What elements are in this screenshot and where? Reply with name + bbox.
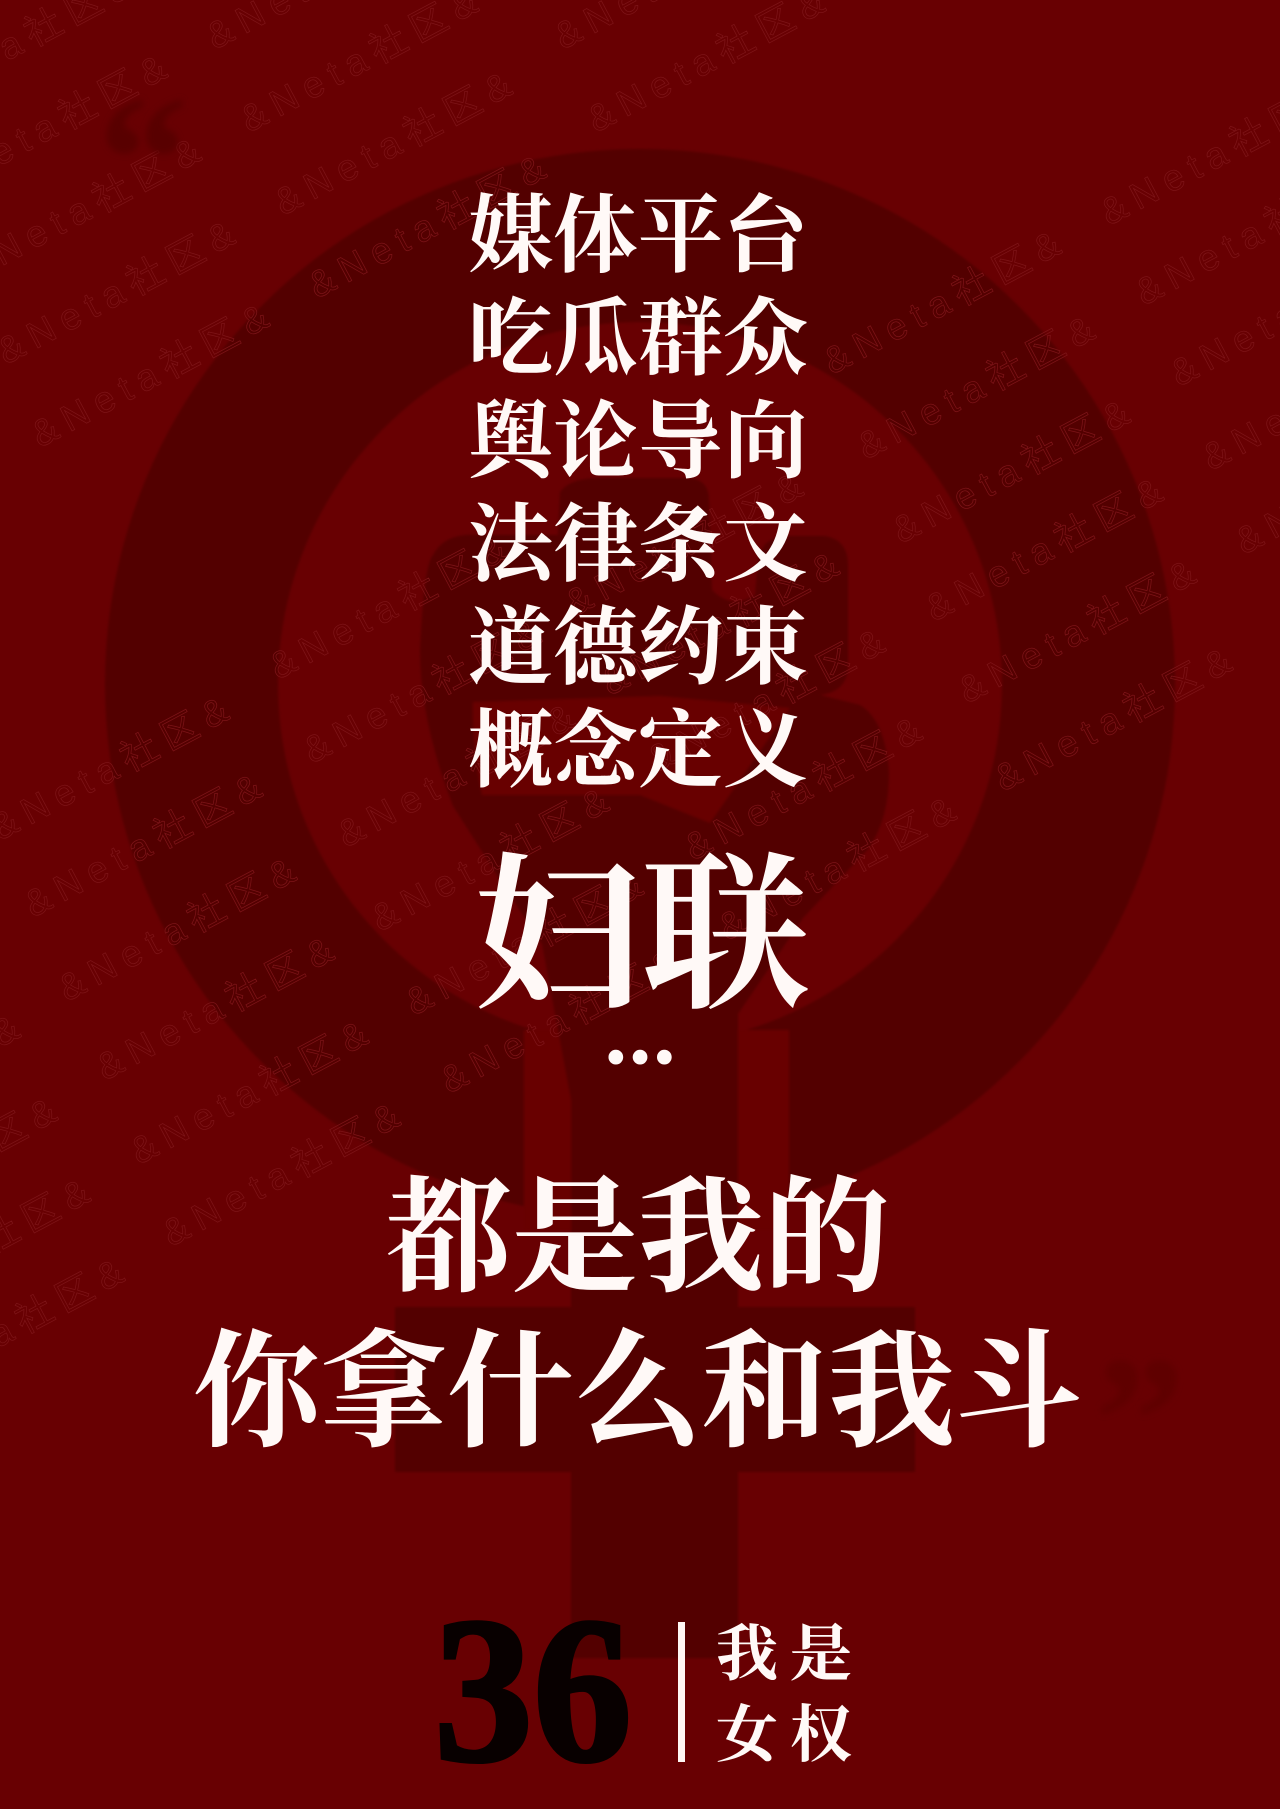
text block: six stacked terms: 概念定义: [468, 705, 808, 799]
raised fist: [420, 478, 889, 1100]
watermark pattern: &Neta社区&: [817, 223, 1067, 382]
ellipsis: …: [604, 998, 676, 1078]
watermark pattern: &Neta社区&: [297, 612, 547, 771]
watermark pattern: &Neta社区&: [988, 640, 1238, 799]
issue number 36: 36: [434, 1575, 632, 1805]
text block: six stacked terms: 舆论导向: [468, 396, 808, 490]
fist cuff gap: [473, 696, 790, 823]
symbol stem: [571, 1000, 738, 1658]
series label: [716, 1621, 864, 1770]
text block: six stacked terms: 法律条文: [468, 499, 808, 593]
watermark pattern: &Neta社区&: [399, 864, 649, 1023]
icon: female symbol with raised fist: [105, 149, 1175, 1658]
watermark pattern: &Neta社区&: [331, 696, 581, 855]
watermark pattern: &Neta社区&: [156, 1095, 406, 1254]
watermark pattern: &Neta社区&: [124, 1013, 374, 1172]
watermark pattern: &Neta社区&: [268, 64, 518, 223]
series label: 女权: [716, 1702, 864, 1770]
ring gap around stem: [524, 1030, 789, 1230]
symbol crossbar: [395, 1307, 915, 1472]
closing quotation mark: ”: [1095, 1320, 1185, 1519]
symbol ring: [105, 149, 1175, 1219]
watermark pattern: &Neta社区&: [302, 147, 552, 306]
watermark pattern: &Neta社区&: [952, 552, 1202, 711]
watermark pattern: &Neta社区&: [851, 308, 1101, 467]
headline line two: 你拿什么和我斗: [193, 1324, 1082, 1464]
headline line one: 都是我的: [386, 1170, 890, 1309]
series label: 我是: [716, 1621, 864, 1689]
watermark pattern: &Neta社区&: [18, 766, 268, 925]
watermark pattern: &Neta社区&: [365, 780, 615, 939]
text block: six stacked terms: 道德约束: [468, 602, 808, 696]
watermark pattern: &Neta社区&: [90, 929, 340, 1088]
watermark pattern: &Neta社区&: [595, 544, 845, 703]
opening quotation mark: “: [98, 59, 188, 258]
watermark pattern: &Neta社区&: [434, 942, 684, 1101]
vertical divider: [678, 1622, 685, 1762]
text block: six stacked terms: 媒体平台: [468, 190, 811, 284]
watermark pattern: &Neta社区&: [678, 709, 928, 868]
watermark pattern: &Neta社区&: [263, 528, 513, 687]
text block: six stacked terms: [468, 190, 811, 799]
watermark pattern: &Neta社区&: [886, 392, 1136, 551]
heading: 妇联: 妇联: [474, 845, 810, 1031]
watermark pattern: &Neta社区&: [712, 789, 962, 948]
text block: six stacked terms: 吃瓜群众: [468, 293, 808, 387]
watermark pattern: &Neta社区&: [641, 621, 891, 780]
watermark pattern: &Neta社区&: [919, 470, 1169, 629]
watermark pattern: &Neta社区&: [52, 850, 302, 1009]
watermark pattern: [0, 0, 1280, 1410]
watermark pattern: &Neta社区&: [25, 296, 275, 455]
watermark pattern: &Neta社区&: [559, 465, 809, 624]
